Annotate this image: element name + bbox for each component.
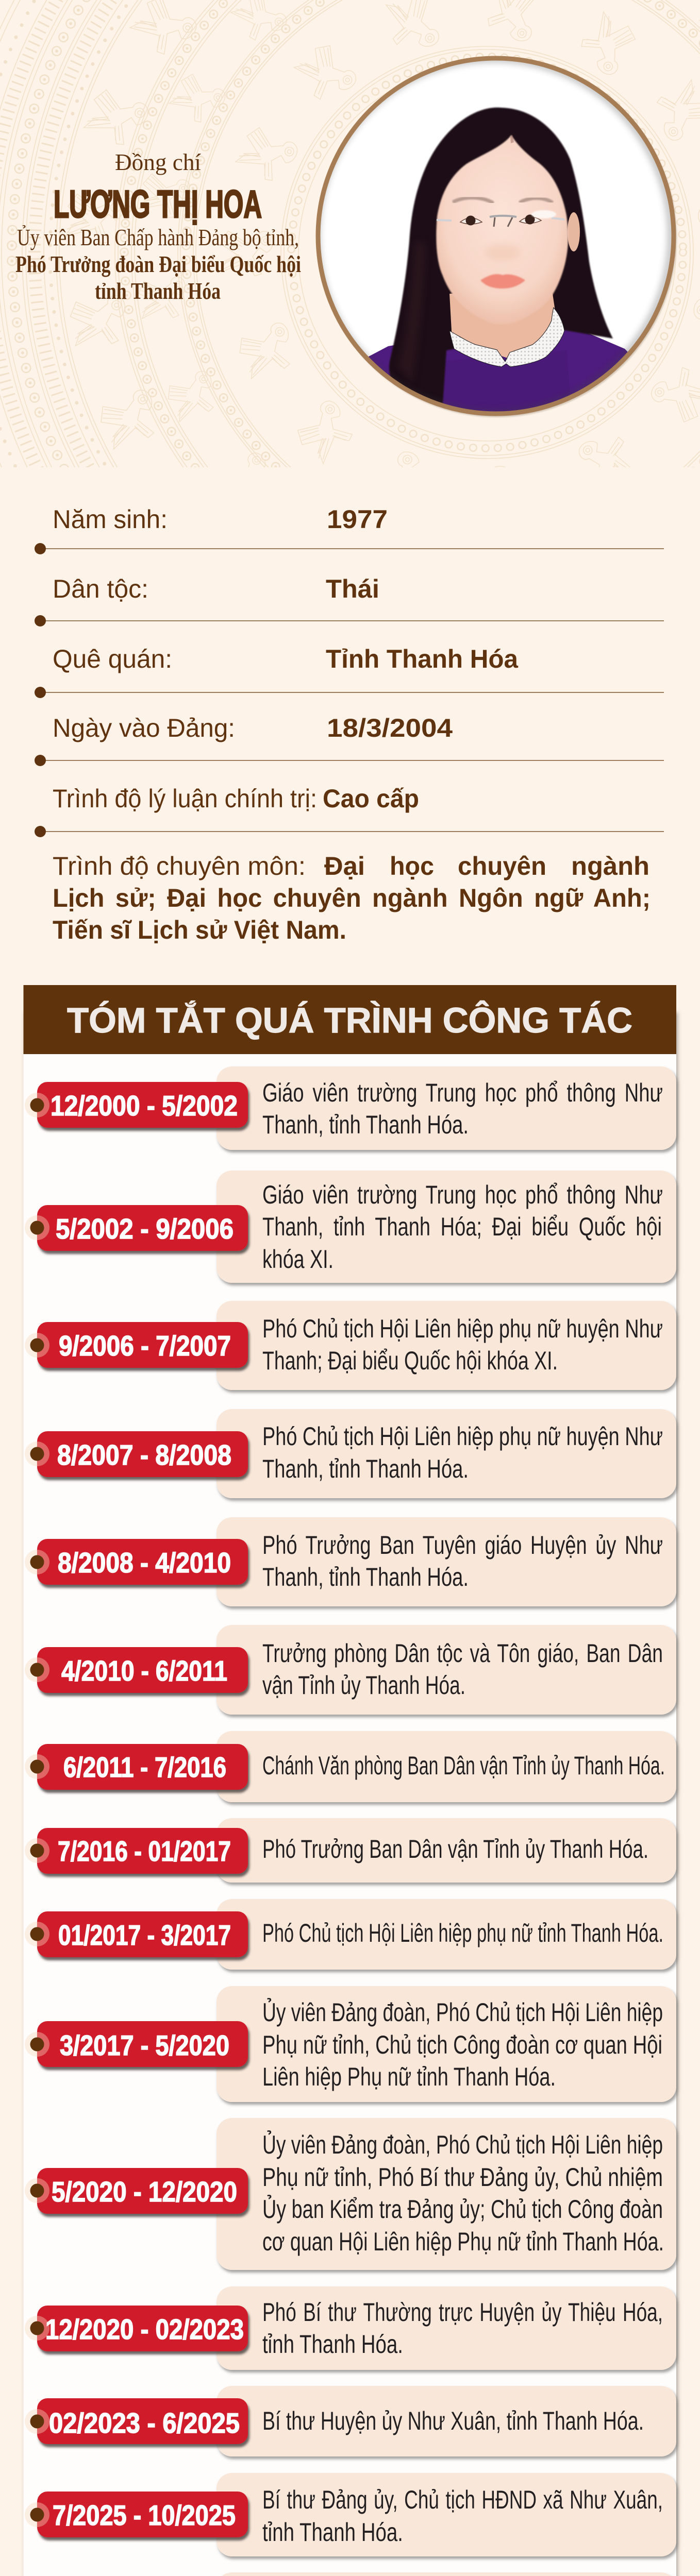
timeline item 4: Thanh, tỉnh Thanh Hóa. [262, 1454, 469, 1483]
timeline item 5 [25, 1517, 676, 1606]
timeline item 3: 9/2006 - 7/2007 [59, 1330, 231, 1362]
birth year: Năm sinh: [53, 505, 168, 534]
panel white body [24, 1010, 676, 2576]
timeline item 7: 6/2011 - 7/2016 [63, 1751, 226, 1783]
professional qualification: Trình độ chuyên môn: [53, 852, 306, 880]
divider row rules with dots [35, 543, 664, 837]
hometown: Quê quán: [53, 645, 172, 673]
timeline item 12: 12/2020 - 02/2023 [45, 2313, 244, 2345]
timeline item 15 [25, 2572, 676, 2576]
frame ring [318, 58, 674, 414]
timeline item 12: tỉnh Thanh Hóa. [262, 2330, 403, 2359]
header text block: name and position [15, 149, 301, 304]
timeline item 14 [25, 2473, 676, 2556]
timeline item 1: 12/2000 - 5/2002 [51, 1090, 238, 1122]
hometown [53, 645, 519, 673]
portrait illustration [316, 59, 686, 428]
ethnicity: Thái [326, 574, 379, 603]
timeline item 6 [25, 1625, 676, 1715]
political theory level: Cao cấp [323, 784, 419, 813]
professional qualification: Tiến sĩ Lịch sử Việt Nam. [53, 916, 346, 944]
photo white backdrop [320, 60, 672, 412]
section heading: TÓM TẮT QUÁ TRÌNH CÔNG TÁC [67, 1001, 632, 1040]
timeline item 1: Thanh, tỉnh Thanh Hóa. [262, 1110, 469, 1139]
portrait in round frame [316, 58, 686, 428]
timeline item 1 [25, 1066, 676, 1150]
timeline item 8: 7/2016 - 01/2017 [58, 1835, 231, 1867]
timeline item 3: Thanh; Đại biểu Quốc hội khóa XI. [262, 1346, 558, 1375]
timeline item 6: 4/2010 - 6/2011 [61, 1655, 227, 1687]
timeline item 10: Liên hiệp Phụ nữ tỉnh Thanh Hóa. [262, 2062, 556, 2091]
timeline item 5: 8/2008 - 4/2010 [58, 1547, 231, 1579]
hometown: Tỉnh Thanh Hóa [326, 645, 519, 673]
timeline item 12 [25, 2286, 676, 2370]
timeline item 4: 8/2007 - 8/2008 [57, 1439, 231, 1471]
header bronze drum background pattern [0, 0, 700, 467]
ethnicity [53, 574, 379, 603]
timeline item 11 [25, 2118, 676, 2270]
party join date: 18/3/2004 [327, 714, 453, 742]
party join date: Ngày vào Đảng: [53, 714, 235, 742]
timeline item 10 [25, 1986, 676, 2102]
timeline item 3 [25, 1301, 676, 1390]
timeline item 4 [25, 1409, 676, 1498]
professional qualification: học [390, 852, 434, 880]
timeline item 10: 3/2017 - 5/2020 [60, 2029, 229, 2061]
timeline item 6: vận Tỉnh ủy Thanh Hóa. [262, 1671, 465, 1700]
timeline item 9 [25, 1899, 676, 1970]
professional qualification: Đại [324, 852, 365, 880]
party join date [53, 714, 453, 742]
professional qualification: Lịch sử; Đại học chuyên ngành Ngôn ngữ Anh; [53, 884, 651, 912]
frame shadow [317, 58, 677, 417]
timeline item 13 [25, 2386, 676, 2456]
birth year: 1977 [327, 505, 388, 534]
timeline item 9: 01/2017 - 3/2017 [58, 1919, 231, 1951]
position line 1: Ủy viên Ban Chấp hành Đảng bộ tỉnh, [17, 224, 299, 250]
timeline item 2: khóa XI. [262, 1245, 334, 1274]
timeline item 2: 5/2002 - 9/2006 [56, 1213, 234, 1245]
timeline item 11: 5/2020 - 12/2020 [52, 2176, 237, 2208]
position line 2: Phó Trưởng đoàn Đại biểu Quốc hội [15, 251, 301, 277]
professional qualification: chuyên [458, 852, 546, 880]
section heading [24, 985, 676, 1054]
professional qualification [53, 852, 651, 944]
ethnicity: Dân tộc: [53, 574, 148, 603]
timeline item 5: Thanh, tỉnh Thanh Hóa. [262, 1563, 469, 1591]
timeline item 13: 02/2023 - 6/2025 [49, 2407, 240, 2439]
timeline item 14: 7/2025 - 10/2025 [53, 2499, 236, 2531]
personal information list [35, 505, 664, 944]
name: LƯƠNG THỊ HOA [54, 182, 262, 226]
salutation: Đồng chí [115, 149, 201, 175]
birth year [53, 505, 388, 534]
position line 3: tỉnh Thanh Hóa [95, 278, 221, 304]
timeline item 7 [25, 1731, 676, 1802]
political theory level: Trình độ lý luận chính trị: [53, 784, 317, 813]
timeline item 14: tỉnh Thanh Hóa. [262, 2518, 403, 2547]
timeline item 2 [25, 1171, 676, 1283]
panel: work history [24, 985, 676, 2576]
professional qualification: ngành [571, 852, 649, 880]
timeline item 8 [25, 1818, 676, 1883]
